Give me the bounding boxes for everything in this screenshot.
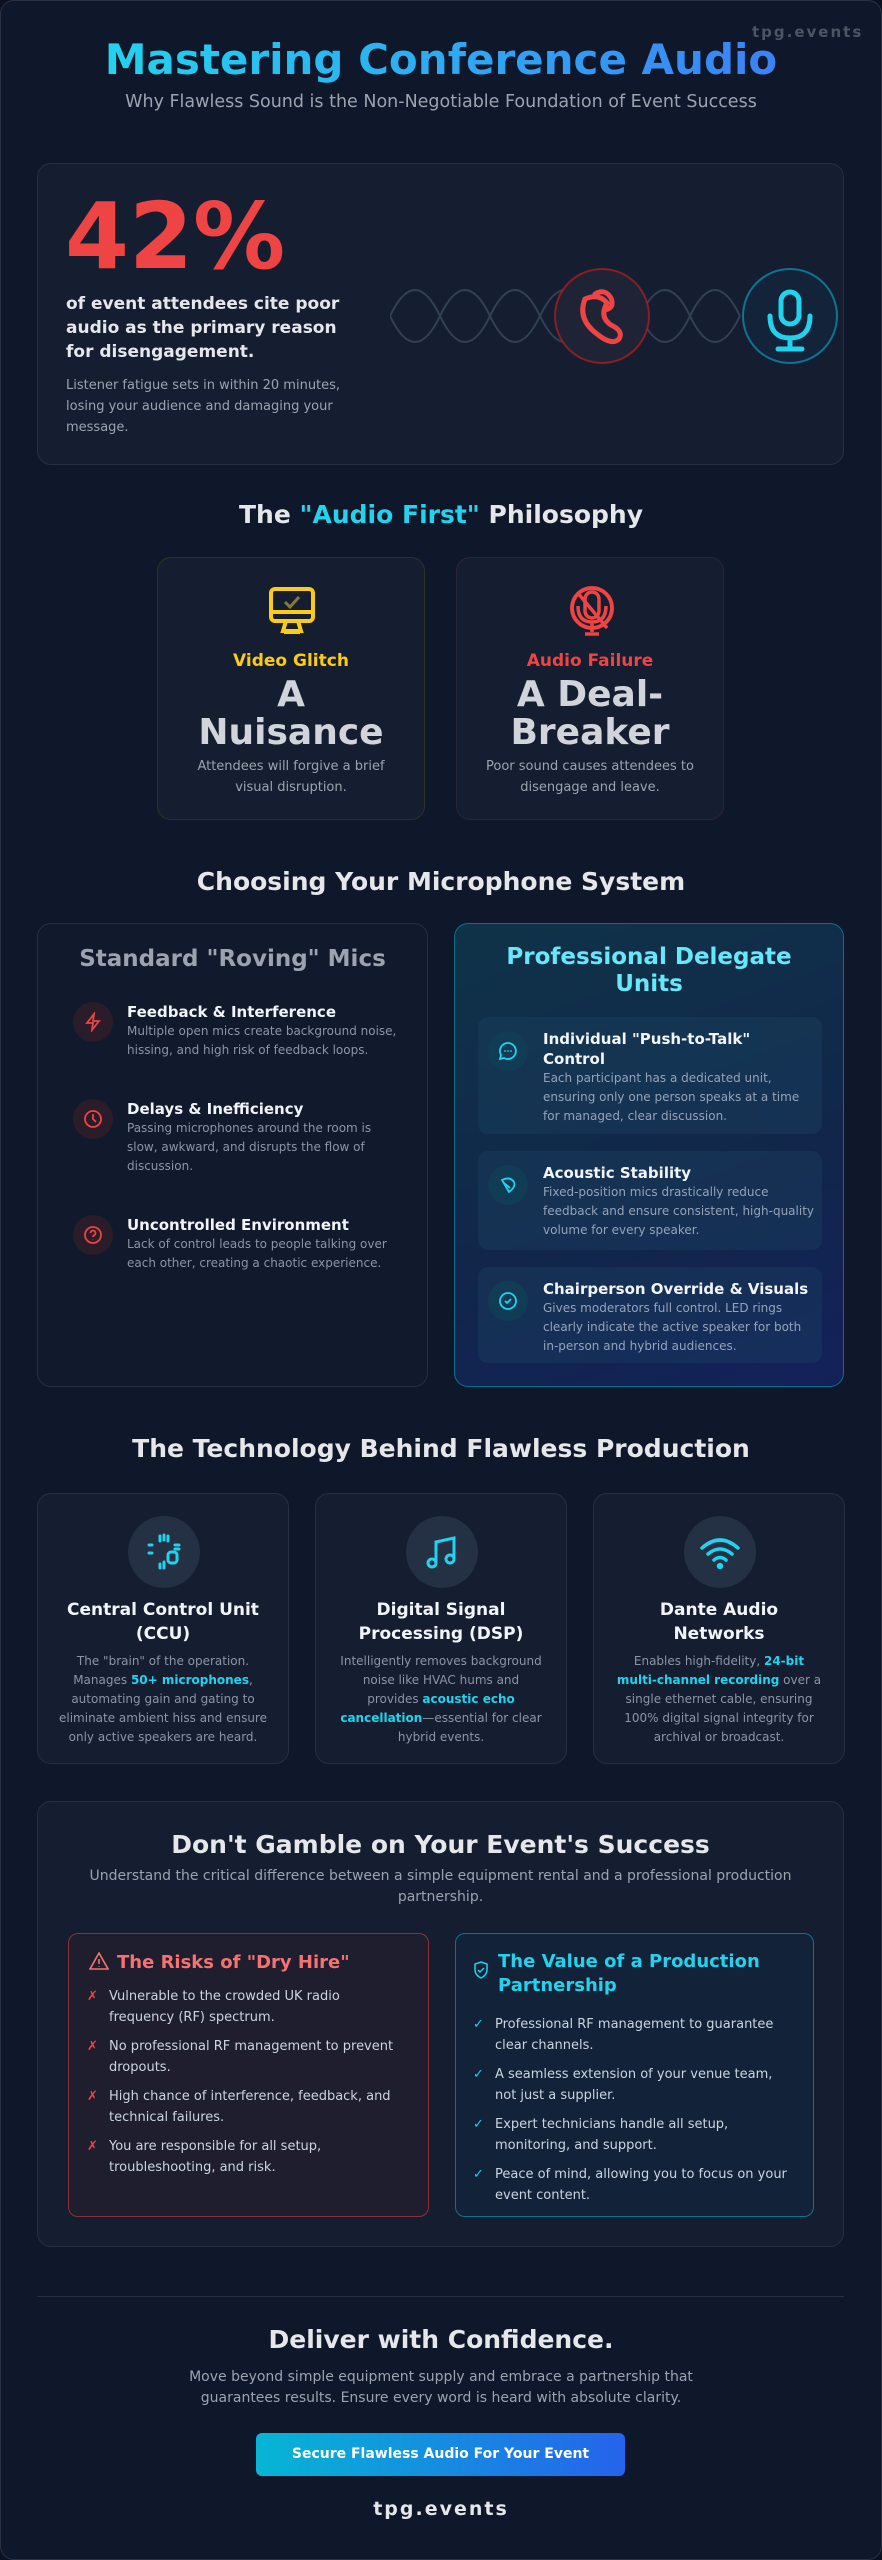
closing text: Move beyond simple equipment supply and embrace a partnership that guarantees results. Ensure every word is heard with absolute clarity. [189, 2369, 693, 2406]
big text: Nuisance [198, 712, 384, 753]
heading [506, 944, 792, 997]
desc: Attendees will forgive a brief visual disruption. [197, 759, 385, 795]
stat note: Listener fatigue sets in within 20 minutes, losing your audience and damaging your message. [66, 378, 340, 435]
list: ✗ [87, 2139, 98, 2154]
item: delays: Delays & Inefficiency [127, 1100, 303, 1118]
item: feedback: Feedback & Interference [127, 1003, 336, 1021]
waveform graphic [390, 268, 838, 364]
icon: monitor [269, 587, 315, 634]
desc: Poor sound causes attendees to disengage and leave. [486, 759, 694, 795]
item: acoustic stability: Acoustic Stability [543, 1164, 691, 1182]
box: partnership value [455, 1933, 814, 2217]
heading: Units [615, 971, 683, 997]
icon: control unit [128, 1516, 200, 1588]
item: uncontrolled [73, 1215, 387, 1270]
item: acoustic stability [478, 1151, 822, 1250]
brand tag: tpg.events [752, 23, 863, 41]
list: You are responsible for all setup, troubleshooting, and risk. [109, 2139, 321, 2175]
title: Mastering Conference Audio [105, 35, 777, 84]
big text [510, 674, 670, 753]
list: ✓ [473, 2067, 484, 2082]
footer brand: tpg.events [373, 2498, 509, 2520]
big text: A [277, 674, 305, 715]
heading: deliver: Deliver with Confidence. [268, 2325, 614, 2354]
list: Vulnerable to the crowded UK radio frequency (RF) spectrum. [109, 1989, 340, 2025]
list: Peace of mind, allowing you to focus on your event content. [495, 2167, 787, 2203]
list: Professional RF management to guarantee clear channels. [495, 2017, 773, 2053]
desc: Enables high-fidelity, 24-bit multi-channel recording over a single ethernet cable, ensuring 100% digital signal integrity for archival or broadcast. [617, 1654, 821, 1744]
item: chairperson: Chairperson Override & Visuals [543, 1280, 808, 1298]
icon: music note [406, 1516, 478, 1588]
heading: Professional Delegate [506, 944, 792, 970]
panel: stat [37, 163, 844, 465]
card: Dante [593, 1493, 845, 1764]
item: uncontrolled: Lack of control leads to people talking over each other, creating a chaotic experience. [127, 1237, 387, 1270]
list: ✓ [473, 2117, 484, 2132]
icon: shield [474, 1961, 488, 1979]
list: No professional RF management to prevent dropouts. [109, 2039, 393, 2075]
list: Expert technicians handle all setup, monitoring, and support. [495, 2117, 728, 2153]
title: Central Control Unit (CCU) [67, 1600, 259, 1644]
item: push to talk: Each participant has a dedicated unit, ensuring only one person speaks at a time for managed, clear discussion. [543, 1071, 799, 1123]
heading: technology: The Technology Behind Flawless Production [132, 1434, 750, 1463]
item: feedback: Multiple open mics create background noise, hissing, and high risk of feedback loops. [127, 1024, 396, 1057]
big text: A Deal- [517, 674, 663, 715]
card: video glitch [157, 557, 425, 820]
subtitle: Understand the critical difference between a simple equipment rental and a professional production partnership. [90, 1868, 791, 1905]
CTA button [256, 2433, 625, 2476]
card: audio failure [456, 557, 724, 820]
big text [198, 674, 384, 753]
heading: Don't Gamble on Your Event's Success [171, 1830, 710, 1859]
item: chairperson [478, 1267, 822, 1363]
item: feedback [73, 1002, 396, 1057]
panel: delegate units [454, 923, 844, 1387]
icon: wifi [684, 1516, 756, 1588]
subtitle: Why Flawless Sound is the Non-Negotiable Foundation of Event Success [125, 92, 757, 112]
stat statement: of event attendees cite poor audio as the primary reason for disengagement. [66, 294, 339, 362]
icon: broken audio [555, 269, 649, 363]
title: Dante Audio Networks [660, 1600, 778, 1644]
item: delays: Passing microphones around the room is slow, awkward, and disrupts the flow of discussion. [127, 1121, 371, 1173]
title: Digital Signal Processing (DSP) [359, 1600, 523, 1644]
big text: Breaker [510, 712, 670, 753]
heading: audio first: The "Audio First" Philosophy [239, 500, 643, 529]
list: A seamless extension of your venue team, not just a supplier. [495, 2067, 772, 2103]
label: Video Glitch [233, 651, 349, 671]
list: ✗ [87, 2039, 98, 2054]
list: ✓ [473, 2167, 484, 2182]
list [87, 1989, 393, 2175]
heading: microphone system: Choosing Your Microphone System [197, 867, 685, 896]
list: High chance of interference, feedback, and technical failures. [109, 2089, 391, 2125]
panel: roving mics [37, 923, 428, 1387]
CTA button: Secure Flawless Audio For Your Event [292, 2446, 589, 2462]
card: CCU [37, 1493, 289, 1764]
panel: gamble [37, 1801, 844, 2247]
card: DSP [315, 1493, 567, 1764]
desc: Intelligently removes background noise like HVAC hums and provides acoustic echo cancellation—essential for clear hybrid events. [340, 1654, 542, 1744]
list: ✓ [473, 2017, 484, 2032]
heading: The Risks of "Dry Hire" [117, 1952, 350, 1973]
item: push to talk: Individual "Push-to-Talk" Control [543, 1030, 750, 1068]
item: push to talk [478, 1017, 822, 1134]
label: Audio Failure [527, 651, 653, 671]
item: uncontrolled: Uncontrolled Environment [127, 1216, 349, 1234]
box: dry hire risks [68, 1933, 429, 2217]
list [473, 2017, 787, 2203]
stat number: 42% [65, 183, 285, 290]
list: ✗ [87, 1989, 98, 2004]
item: acoustic stability: Fixed-position mics drastically reduce feedback and ensure consistent, high-quality volume for every speaker. [543, 1185, 814, 1237]
icon: microphone [743, 269, 837, 363]
heading: Standard "Roving" Mics [79, 946, 386, 972]
item: chairperson: Gives moderators full control. LED rings clearly indicate the active speaker for both in-person and hybrid audiences. [543, 1301, 801, 1353]
heading: The Value of a Production Partnership [498, 1951, 760, 1996]
list: ✗ [87, 2089, 98, 2104]
item: delays [73, 1099, 371, 1173]
desc: The "brain" of the operation. Manages 50+ microphones, automating gain and gating to eliminate ambient hiss and ensure only active speakers are heard. [59, 1654, 267, 1744]
icon: mic off [570, 586, 614, 636]
